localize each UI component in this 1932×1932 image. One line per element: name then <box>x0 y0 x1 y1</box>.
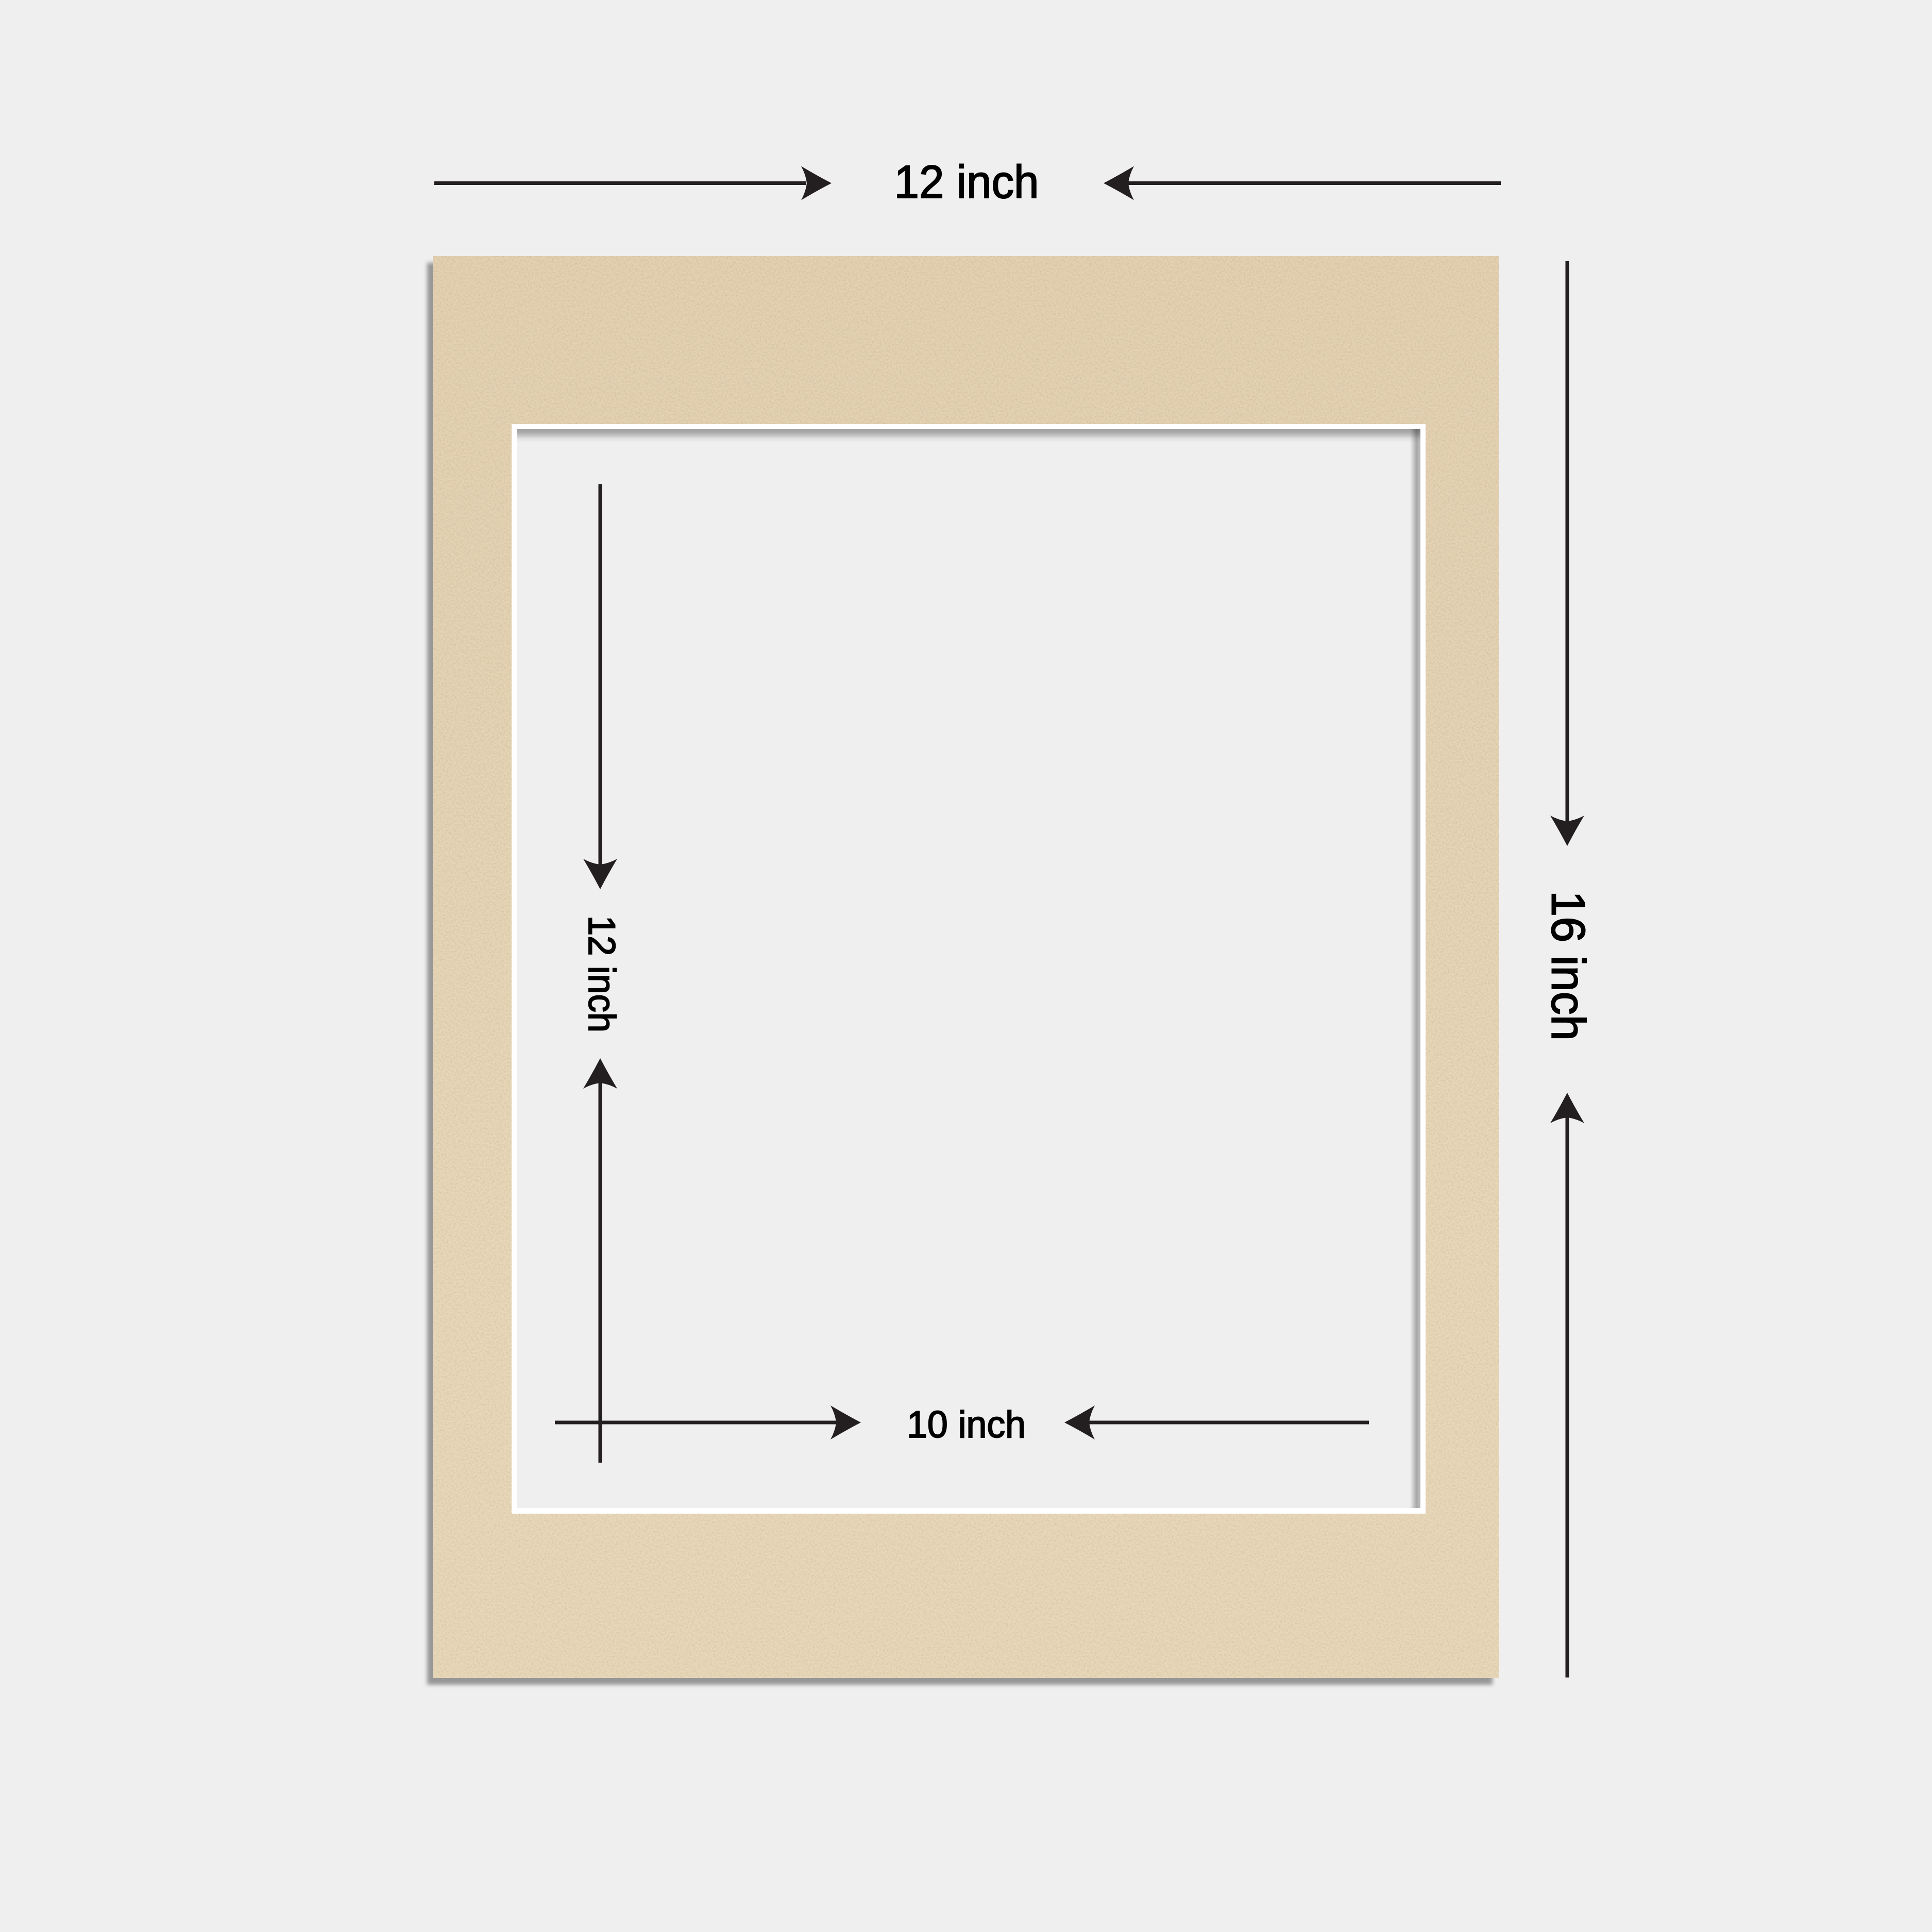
white bevel edge of opening <box>512 424 1426 1514</box>
label: 16 inch: 16 inch <box>1541 891 1594 1041</box>
arrow: right side pointing down <box>1550 261 1584 846</box>
dimension: opening width 10 inch <box>555 1404 1369 1446</box>
arrow: right side pointing up <box>1550 1093 1584 1677</box>
mat paper grain <box>433 256 1499 1678</box>
opening top inner shadow <box>517 429 1420 443</box>
arrow: inner pointing up <box>583 1058 617 1463</box>
mat drop shadow <box>427 263 1493 1685</box>
opening right inner shadow <box>1410 429 1420 1508</box>
label: 12 inch: 12 inch <box>581 916 622 1032</box>
panel: mat board <box>427 256 1499 1685</box>
mat surface <box>433 256 1499 1678</box>
label: 12 inch: 12 inch <box>894 157 1039 208</box>
label: 10 inch: 10 inch <box>907 1404 1026 1446</box>
arrow: top left pointing right <box>434 166 832 200</box>
arrow: top right pointing left <box>1104 166 1501 200</box>
arrow: inner bottom pointing left <box>1064 1405 1369 1439</box>
dimension: outer width 12 inch <box>434 157 1501 208</box>
dimension: opening height 12 inch <box>581 484 622 1463</box>
dimension: outer height 16 inch <box>1541 261 1594 1677</box>
arrow: inner pointing down <box>583 484 617 889</box>
arrow: inner bottom pointing right <box>555 1405 861 1439</box>
opening <box>517 429 1420 1508</box>
